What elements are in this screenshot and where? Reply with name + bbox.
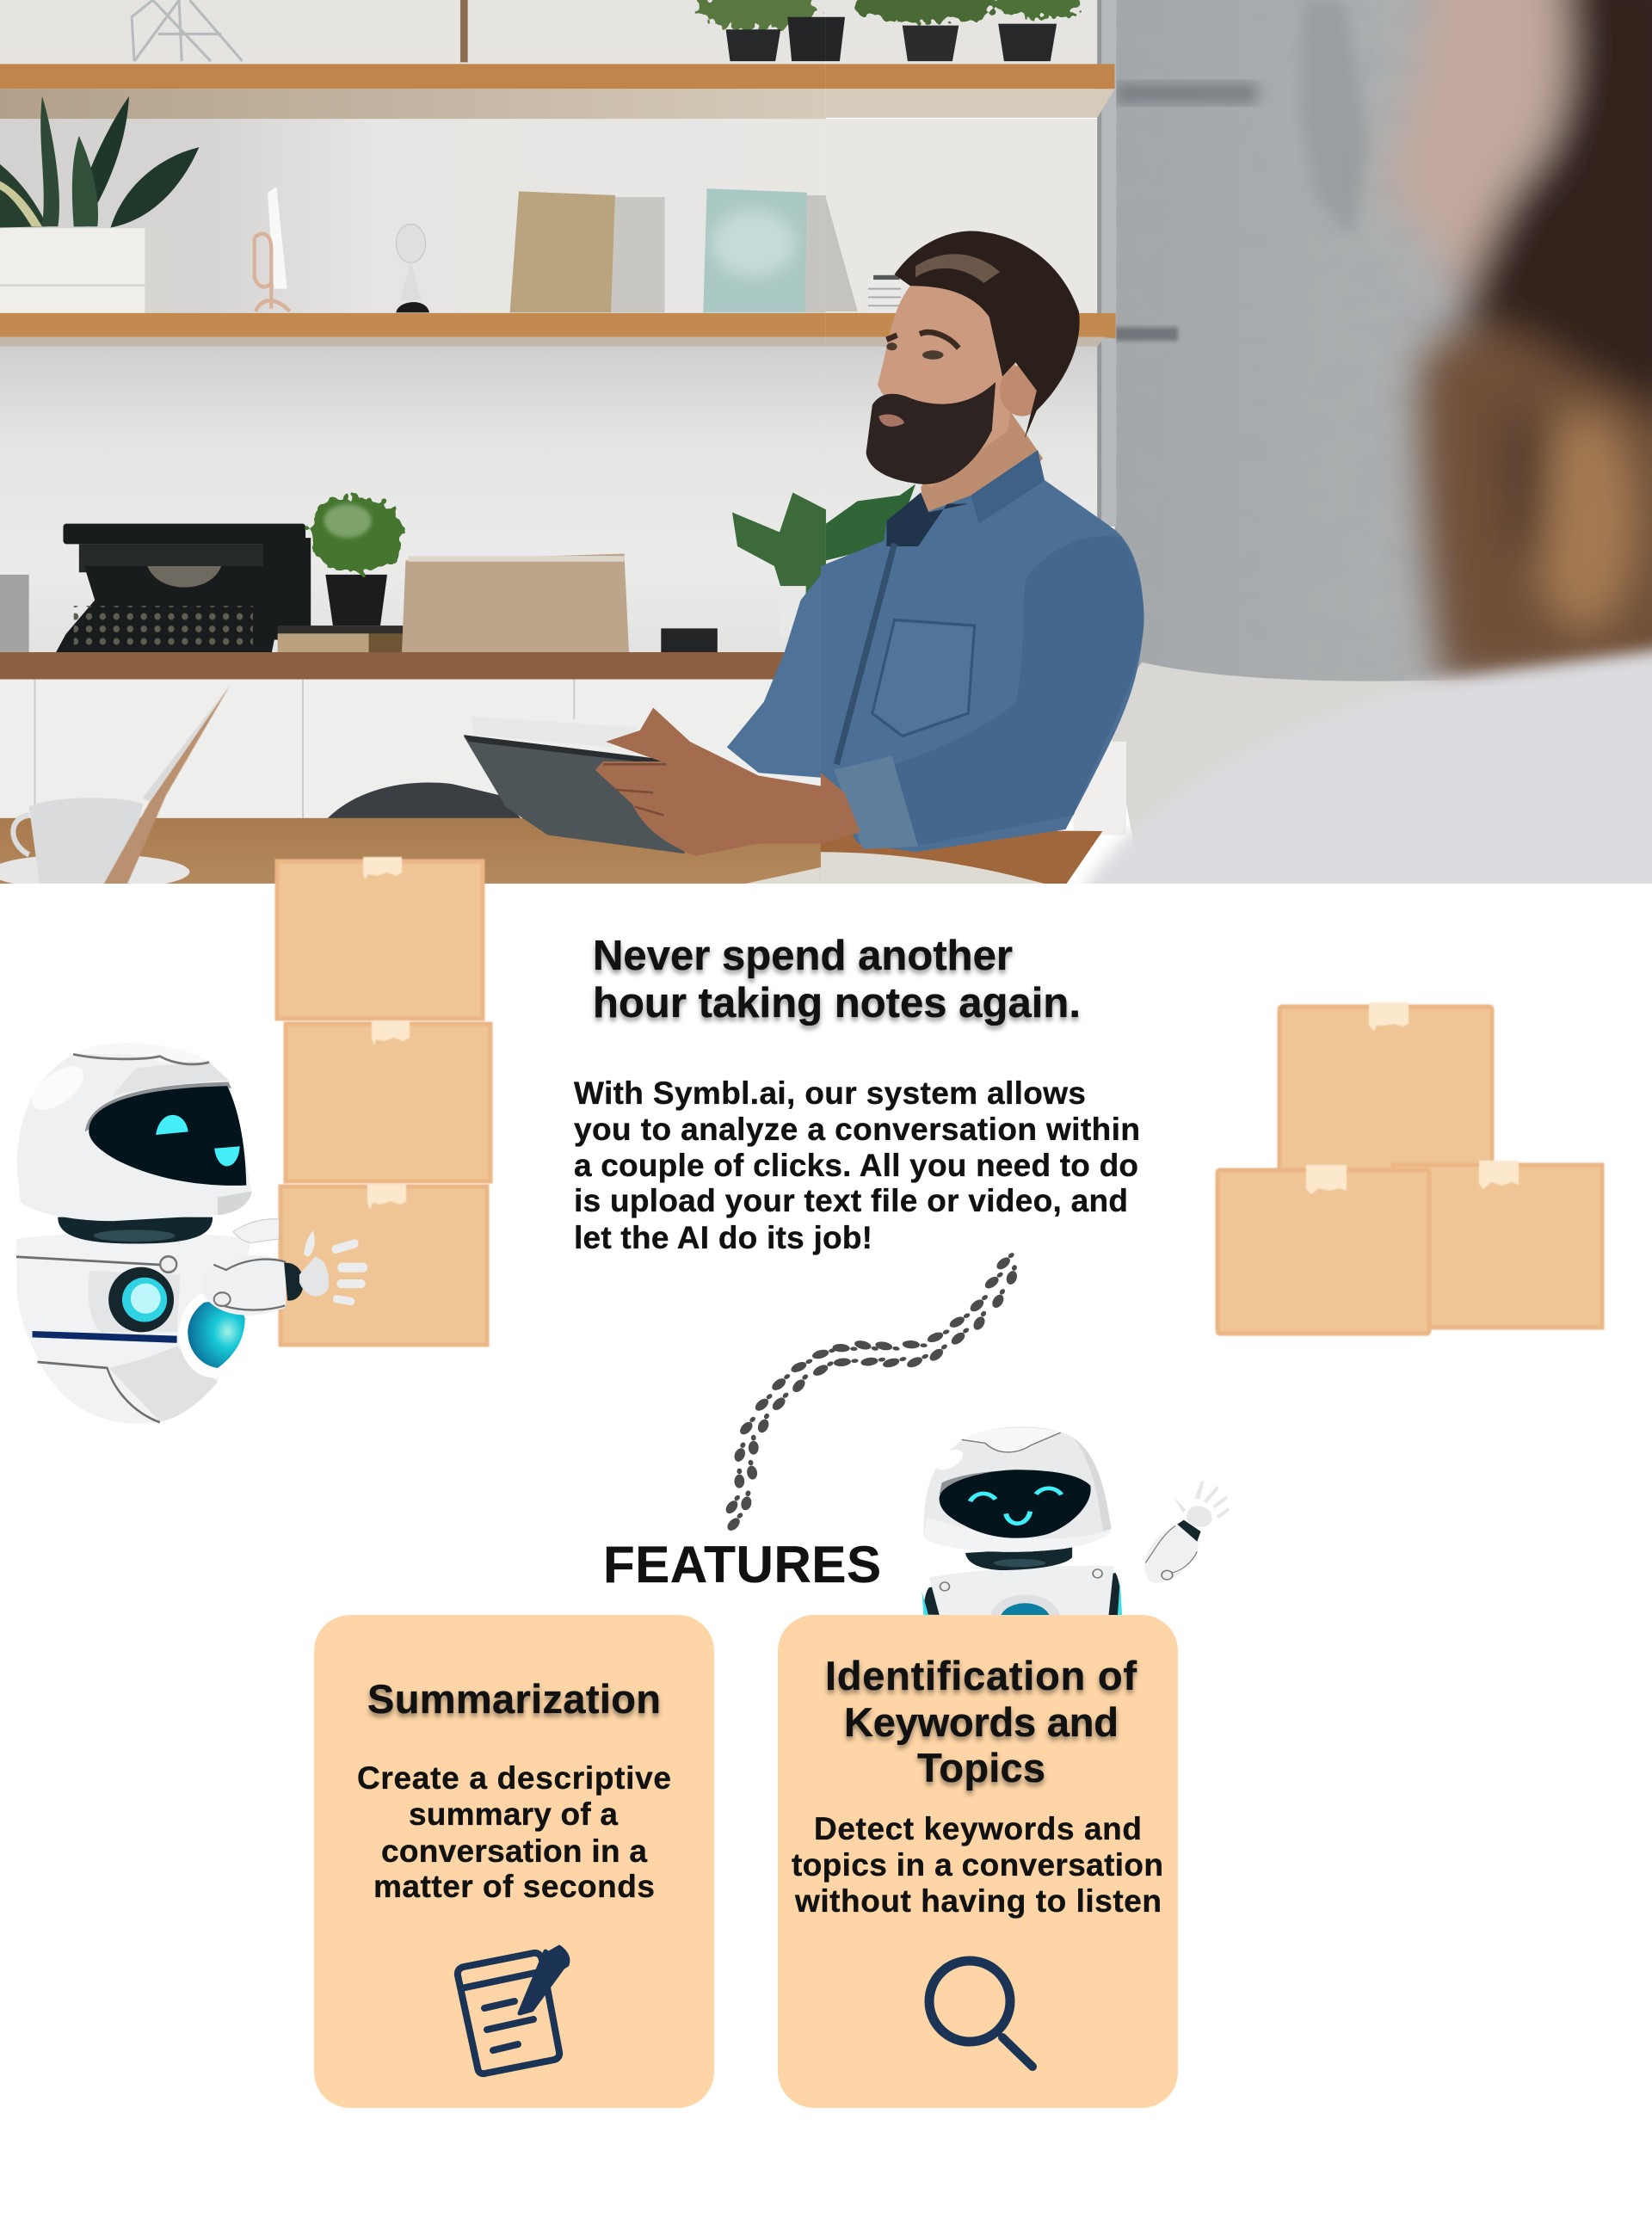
card heading [825, 1653, 1137, 1790]
heading: never spend another hour [593, 933, 1081, 1026]
intro paragraph: a couple of clicks. All you need to do [574, 1148, 1138, 1183]
box top [277, 857, 483, 1019]
teal book [804, 195, 826, 312]
card heading: Summarization [367, 1676, 661, 1722]
robot body [16, 1233, 252, 1424]
hero photo: man with tablet in office [0, 0, 1652, 906]
waving robot peeking above card [922, 1427, 1230, 1641]
man's ear [1000, 365, 1044, 416]
waving robot head [924, 1427, 1112, 1552]
intro paragraph [574, 1075, 1140, 1255]
steel post [1097, 0, 1116, 527]
trousers [327, 783, 521, 818]
desk [821, 829, 1102, 889]
blurred woman: hair and skin [1387, 0, 1652, 685]
man's face [873, 286, 1017, 487]
robot back arm [233, 1219, 279, 1243]
arrow: footprints trail [724, 1251, 1020, 1532]
waving robot visor [940, 1470, 1091, 1538]
card description [792, 1811, 1163, 1919]
shirt lower-left portion [726, 575, 821, 778]
potted plants top shelf [695, 0, 822, 28]
robot neck [58, 1217, 213, 1243]
card heading: Identification of [825, 1653, 1137, 1698]
box right [1393, 1161, 1602, 1328]
sideboard top [0, 652, 826, 680]
left blurred jar [0, 575, 29, 656]
candle and holder [268, 187, 287, 289]
intro paragraph: you to analyze a conversation within [574, 1112, 1140, 1147]
robot holding boxes [16, 1043, 367, 1424]
kraft desk calendar [402, 554, 629, 652]
tablet [471, 716, 638, 748]
man's neck [921, 397, 1043, 529]
robot front arm [202, 1255, 304, 1316]
card description: topics in a conversation [792, 1847, 1163, 1883]
eyebrows and eyes [886, 332, 959, 348]
sideboard cabinets [0, 680, 826, 821]
intro paragraph: With Symbl.ai, our system allows [574, 1075, 1086, 1111]
card description: Detect keywords and [814, 1811, 1142, 1846]
green plant and pot [325, 575, 387, 625]
card description: conversation in a [381, 1833, 647, 1869]
black box [661, 628, 718, 654]
card description: Create a descriptive [357, 1760, 671, 1796]
man's hair [895, 231, 1080, 439]
shelves [826, 64, 1114, 89]
waving robot neck [965, 1546, 1072, 1570]
paper on desk [821, 852, 1063, 889]
geometric ornament [132, 0, 243, 61]
chair [1111, 662, 1484, 886]
card heading: Topics [917, 1745, 1045, 1790]
upper shelf [0, 64, 826, 89]
icon: magnifying glass [929, 1961, 1032, 2067]
box middle [286, 1020, 490, 1181]
photo right half: man, concrete wall, blurred woman [821, 0, 1652, 906]
card description: without having to listen [794, 1883, 1162, 1919]
coffee cup [0, 856, 189, 884]
laptop lid [102, 685, 231, 886]
robot hand [299, 1231, 367, 1306]
pots top shelf [853, 0, 1000, 22]
card: summarization [314, 1615, 714, 2108]
stack of three boxes behind left robot [277, 857, 490, 1345]
waving robot body [922, 1566, 1122, 1641]
heading: never spend another hour: Never spend another [593, 933, 1013, 979]
card heading: Keywords and [844, 1699, 1119, 1745]
forearm stub [821, 773, 860, 843]
man's beard [866, 382, 996, 484]
heading: never spend another hour: hour taking notes again. [593, 980, 1081, 1026]
robot visor [89, 1086, 246, 1186]
card description: summary of a [409, 1796, 618, 1832]
intro paragraph: let the AI do its job! [574, 1220, 872, 1255]
blurred woman: white top [1074, 645, 1652, 906]
desk [0, 818, 826, 889]
card: identification of keywords and topics [778, 1615, 1178, 2108]
intro paragraph: is upload your text file or video, and [574, 1183, 1128, 1218]
box left [1217, 1165, 1429, 1334]
box top [1279, 1002, 1492, 1174]
book stack [868, 279, 901, 312]
concrete wall [1115, 0, 1545, 681]
box bottom [280, 1185, 487, 1345]
denim shirt [821, 450, 1143, 852]
white planter [0, 228, 145, 313]
robot head [17, 1043, 252, 1221]
card description [357, 1760, 671, 1904]
tan book [611, 197, 665, 312]
stack of three boxes on the right [1217, 1002, 1602, 1334]
waving robot arm [1145, 1482, 1230, 1583]
plant left of man [826, 484, 915, 560]
photo left half: shelves and desk [0, 0, 832, 890]
snake plant [0, 164, 47, 228]
card description: matter of seconds [373, 1869, 655, 1904]
book under plant [277, 633, 368, 652]
icon: notepad and pencil [458, 1946, 569, 2074]
plant behind man [732, 492, 826, 594]
features heading: FEATURES [603, 1536, 881, 1593]
hand and forearm [595, 708, 826, 856]
middle shelf [0, 313, 826, 337]
typewriter [56, 523, 311, 652]
hourglass [396, 225, 426, 262]
